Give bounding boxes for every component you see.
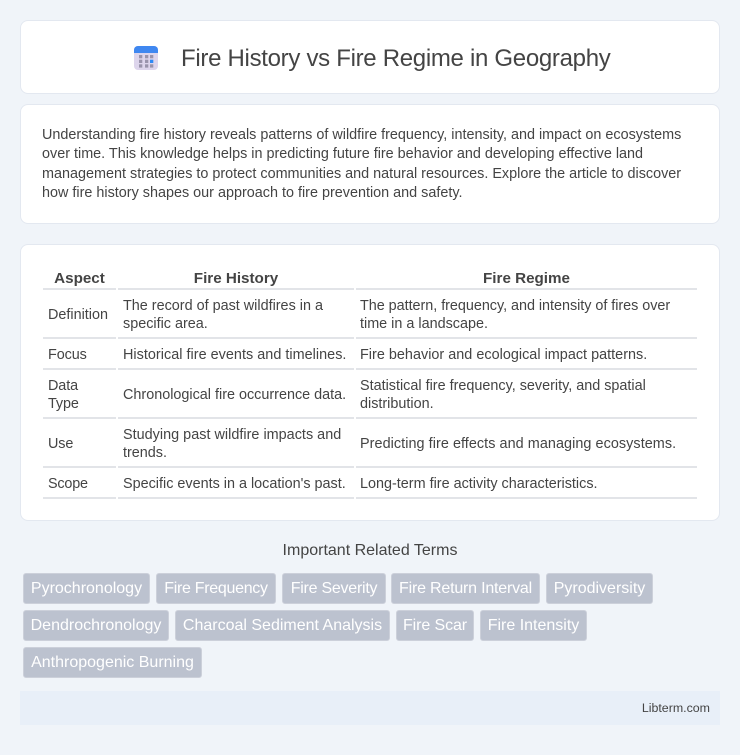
tag: Dendrochronology <box>31 617 161 634</box>
table header row: Fire History <box>194 270 278 287</box>
row: data type: Chronological fire occurrence data. <box>123 387 346 403</box>
tag <box>391 573 540 604</box>
row: definition: Definition <box>48 307 108 323</box>
tag: Fire Frequency <box>164 580 268 597</box>
row: definition: The pattern, frequency, and intensity of fires over <box>360 298 670 314</box>
tag: Fire Intensity <box>488 617 579 634</box>
intro paragraph: Understanding fire history reveals patterns of wildfire frequency, intensity, and impact on ecosystems <box>42 127 681 143</box>
row: focus: Fire behavior and ecological impact patterns. <box>360 347 647 363</box>
row: data type <box>48 378 646 412</box>
tag <box>156 573 276 604</box>
row: use: Studying past wildfire impacts and <box>123 427 341 443</box>
intro paragraph: how fire history shapes our approach to fire prevention and safety. <box>42 185 462 201</box>
row: use: trends. <box>123 445 167 461</box>
row: definition: time in a landscape. <box>360 316 488 332</box>
intro paragraph: over time. This knowledge helps in predicting future fire behavior and developing effective land <box>42 146 643 162</box>
row: scope: Scope <box>48 476 88 492</box>
tag: Anthropogenic Burning <box>31 654 194 671</box>
tag <box>175 610 390 641</box>
icon: calendar grid <box>134 46 158 70</box>
row: use <box>48 427 676 461</box>
row: data type: Statistical fire frequency, severity, and spatial <box>360 378 646 394</box>
intro paragraph: management strategies to protect communities and natural resources. Explore the article to discover <box>42 166 681 182</box>
title: Fire History vs Fire Regime in Geography <box>181 45 610 72</box>
row: scope <box>48 476 598 492</box>
tag <box>23 573 150 604</box>
table header row <box>54 270 570 287</box>
row: scope: Long-term fire activity characteristics. <box>360 476 598 492</box>
heading: related terms: Important Related Terms <box>283 542 457 559</box>
tag: Pyrodiversity <box>554 580 645 597</box>
tag <box>282 573 386 604</box>
row: data type: Data <box>48 378 78 394</box>
tag <box>23 647 202 678</box>
header card <box>20 20 720 94</box>
table header row: Aspect <box>54 270 105 287</box>
panel: comparison table <box>20 244 720 521</box>
tag <box>480 610 587 641</box>
intro paragraph <box>42 127 681 201</box>
tag: Fire Scar <box>403 617 467 634</box>
row: focus <box>48 347 647 363</box>
tag: Pyrochronology <box>31 580 142 597</box>
row: focus: Focus <box>48 347 87 363</box>
footer credit: Libterm.com <box>642 701 710 715</box>
tag group: related terms <box>23 573 653 678</box>
tag <box>546 573 653 604</box>
row: definition <box>48 298 670 332</box>
table header row: Fire Regime <box>483 270 570 287</box>
row: scope: Specific events in a location's past. <box>123 476 346 492</box>
row: use: Predicting fire effects and managing ecosystems. <box>360 436 676 452</box>
tag <box>396 610 474 641</box>
row: data type: distribution. <box>360 396 434 412</box>
panel: intro text <box>20 104 720 224</box>
tag: Charcoal Sediment Analysis <box>183 617 382 634</box>
footer bar <box>20 691 720 725</box>
tag: Fire Severity <box>291 580 377 597</box>
row: data type: Type <box>48 396 79 412</box>
tag <box>23 610 169 641</box>
row: definition: specific area. <box>123 316 208 332</box>
row: definition: The record of past wildfires in a <box>123 298 323 314</box>
row: focus: Historical fire events and timelines. <box>123 347 346 363</box>
row: use: Use <box>48 436 73 452</box>
tag: Fire Return Interval <box>399 580 532 597</box>
